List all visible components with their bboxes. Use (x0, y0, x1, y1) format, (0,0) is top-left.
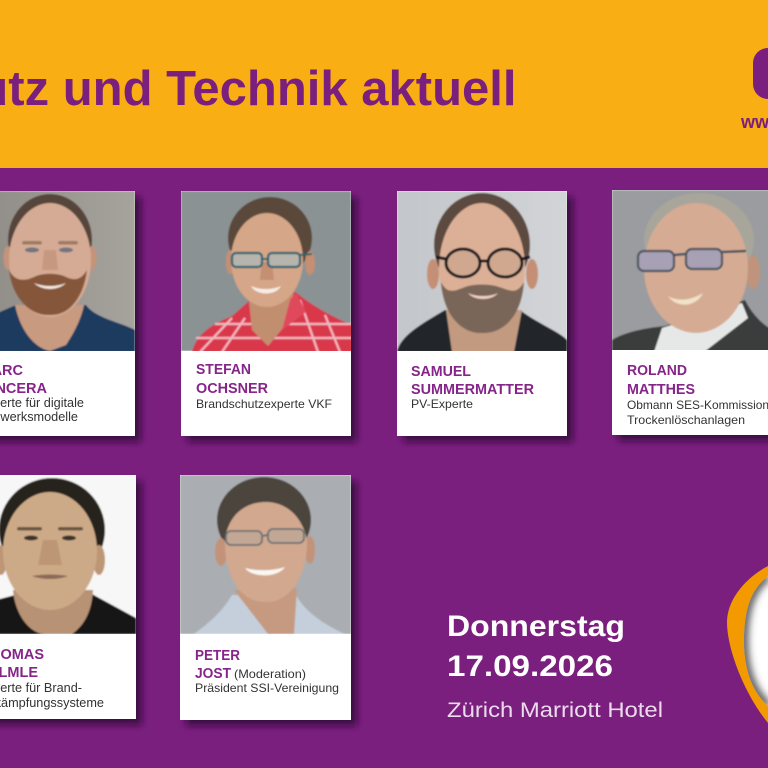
photo: Stefan (181, 191, 352, 352)
name and role: Samuel: PV-Experte (411, 397, 473, 411)
panel: speaker Stefan (181, 191, 357, 442)
orange blob with white cutout (727, 566, 768, 723)
header band (0, 0, 768, 168)
event date and venue (447, 610, 663, 722)
name and role: Samuel: SUMMERMATTER (411, 382, 535, 398)
name and role: Peter: Präsident SSI-Vereinigung (195, 681, 339, 695)
photo: Samuel (397, 191, 567, 352)
name and role: Samuel (411, 364, 535, 411)
logo (740, 48, 768, 132)
panel: speaker Samuel (397, 191, 573, 442)
panel: speaker Marc (0, 191, 141, 442)
name and role: Stefan: STEFAN (196, 362, 251, 378)
name and role: Roland: Obmann SES-Kommission (627, 398, 768, 412)
name and role: Stefan: OCHSNER (196, 381, 269, 397)
name and role: Peter: JOST (195, 666, 231, 682)
name and role: Roland: MATTHES (627, 382, 695, 398)
name and role: Stefan: Brandschutzexperte VKF (196, 397, 332, 411)
name and role: Peter: (Moderation) (234, 667, 306, 681)
name and role: Samuel: SAMUEL (411, 364, 471, 380)
panel: speaker Roland (612, 190, 768, 441)
name and role: Peter: PETER (195, 648, 240, 664)
photo: Peter (180, 475, 351, 634)
event date and venue: Donnerstag (447, 610, 625, 643)
name and role: Roland: ROLAND (627, 363, 687, 379)
name and role: Roland (627, 363, 768, 427)
panel: speaker Peter (180, 475, 357, 726)
name and role: Thomas (0, 647, 104, 710)
name and role: Marc (0, 363, 84, 424)
panel: speaker Thomas (0, 475, 142, 725)
photo: Roland (612, 190, 768, 352)
name and role: Stefan (196, 362, 332, 411)
name and role: Roland: Trockenlöschanlagen (627, 413, 745, 427)
photo: Thomas (0, 475, 136, 634)
event date and venue: Zürich Marriott Hotel (447, 699, 663, 722)
event date and venue: 17.09.2026 (447, 650, 613, 683)
photo: Marc (0, 191, 135, 352)
name and role: Peter (195, 648, 339, 695)
